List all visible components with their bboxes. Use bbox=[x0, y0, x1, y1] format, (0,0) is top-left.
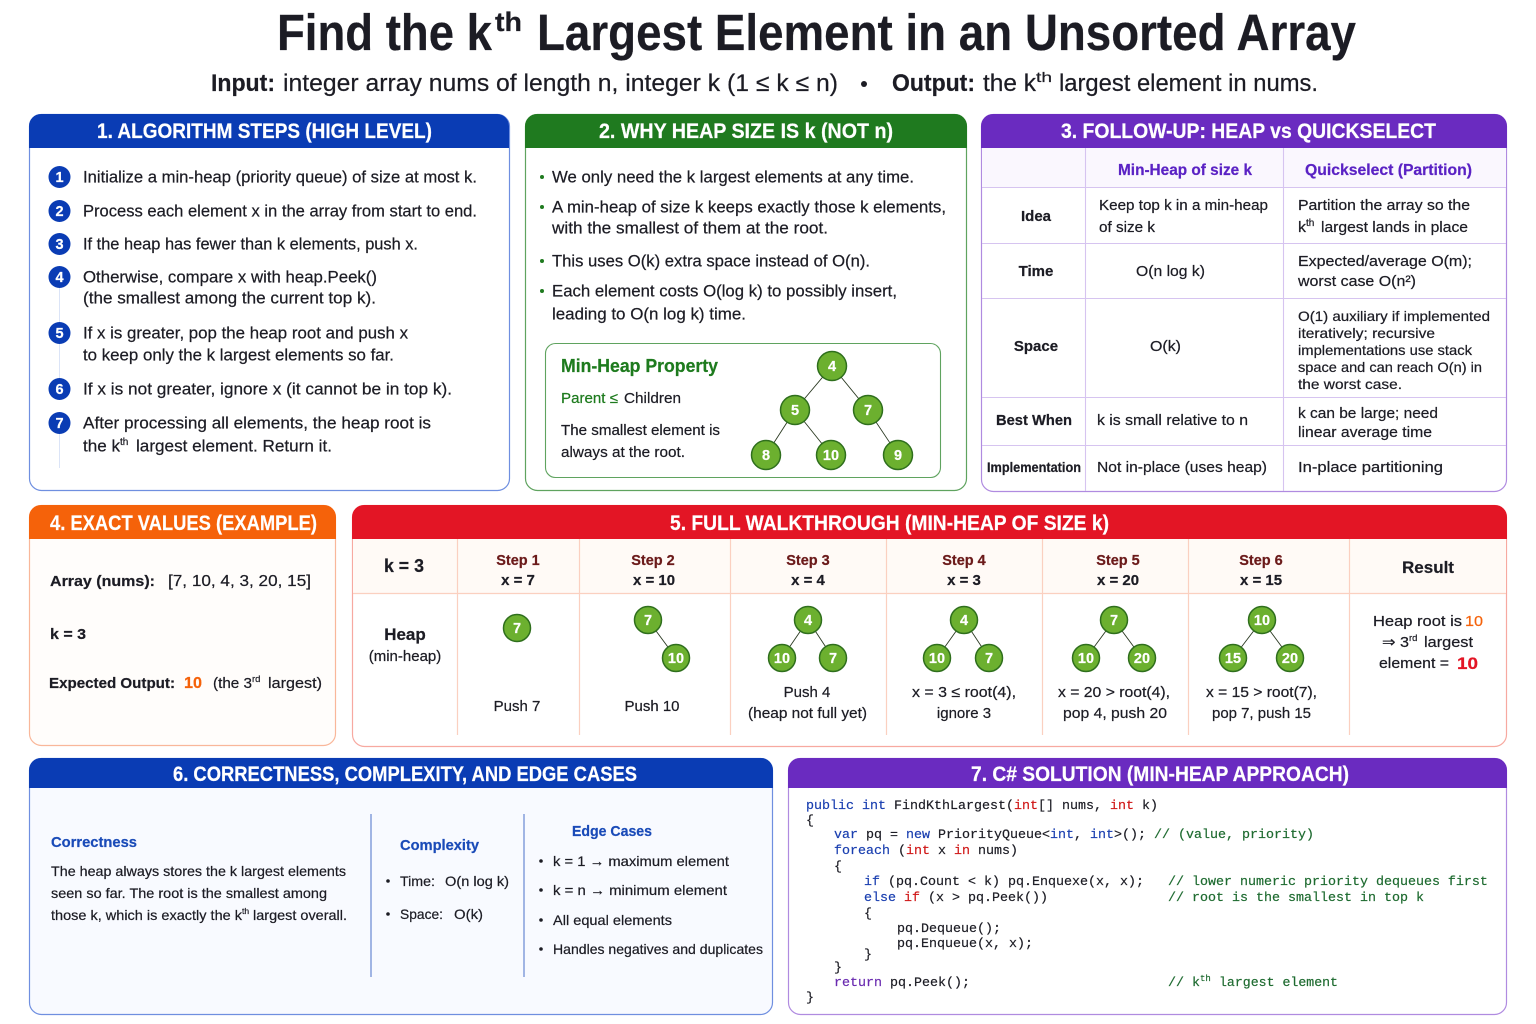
code block: pq.Dequeue(); bbox=[897, 922, 1001, 937]
complexity text: Space: bbox=[400, 906, 443, 922]
row: idea: Idea bbox=[1021, 208, 1052, 225]
step connectors bbox=[58, 288, 60, 468]
complexity text: O(n log k) bbox=[445, 873, 509, 889]
min-heap tree diagram bbox=[752, 352, 912, 470]
step 5: x = 20 bbox=[1097, 572, 1139, 589]
step 2: Step 2 bbox=[631, 553, 675, 569]
code block: pq.Enqueue(x, x); bbox=[897, 937, 1033, 952]
callout: min-heap property: Children bbox=[624, 390, 681, 407]
row: idea: largest lands in place bbox=[1321, 219, 1468, 236]
heading: algorithm steps: 1. ALGORITHM STEPS (HIGH LEVEL) bbox=[97, 120, 432, 143]
row: time: worst case O(n²) bbox=[1297, 273, 1416, 290]
step 6: 20 bbox=[1282, 651, 1298, 667]
row: idea bbox=[1021, 197, 1470, 236]
row labels: (min-heap) bbox=[369, 648, 441, 665]
step 4: x = 3 ≤ root(4), bbox=[912, 684, 1016, 701]
step 6: 15 bbox=[1225, 651, 1241, 667]
correctness text: largest overall. bbox=[253, 907, 347, 923]
expected output bbox=[49, 674, 322, 692]
step 6 bbox=[1206, 553, 1317, 722]
panel: heap vs quickselect bbox=[981, 114, 1507, 492]
table column headers bbox=[1118, 162, 1472, 179]
edge cases text: k = n → minimum element bbox=[553, 882, 727, 898]
row: implementation: Not in-place (uses heap) bbox=[1097, 459, 1267, 476]
step 4 bbox=[912, 553, 1016, 722]
result column: ⇒ 3 bbox=[1382, 634, 1409, 651]
correctness text: those k, which is exactly the k bbox=[51, 907, 243, 923]
title: Largest Element in an Unsorted Array bbox=[537, 4, 1357, 61]
row: time: Time bbox=[1019, 263, 1053, 280]
table column headers: Quickselect (Partition) bbox=[1305, 162, 1472, 179]
code block: public int FindKthLargest(int[] nums, int k) bbox=[806, 799, 1158, 814]
step 5 bbox=[48, 322, 409, 364]
callout: min-heap property: The smallest element is bbox=[561, 422, 720, 439]
step 1: Step 1 bbox=[496, 553, 540, 569]
heading: why heap size: 2. WHY HEAP SIZE IS k (NOT n) bbox=[599, 120, 893, 143]
code block: return pq.Peek(); bbox=[834, 976, 970, 991]
step 2 bbox=[624, 553, 690, 715]
title: Find the k bbox=[277, 4, 493, 61]
code block bbox=[806, 799, 1488, 1006]
step 6: x = 15 bbox=[1240, 572, 1282, 589]
step 2: 2 bbox=[55, 204, 64, 220]
callout: min-heap property: always at the root. bbox=[561, 444, 685, 461]
bullet list: We only need the k largest elements at any time. bbox=[552, 168, 914, 186]
complexity text: Complexity bbox=[400, 837, 480, 854]
row labels: Heap bbox=[384, 625, 426, 644]
row: idea: Partition the array so the bbox=[1298, 197, 1470, 214]
bullet list bbox=[540, 168, 946, 324]
panel: exact values bbox=[29, 505, 336, 746]
expected output: rd bbox=[252, 674, 260, 685]
code block: // lower numeric priority dequeues first bbox=[1168, 875, 1488, 890]
step 4: Otherwise, compare x with heap.Peek() bbox=[83, 268, 377, 286]
step 5: to keep only the k largest elements so far. bbox=[83, 346, 394, 364]
row: time: Expected/average O(m); bbox=[1298, 253, 1472, 270]
bullet list: A min-heap of size k keeps exactly those k elements, bbox=[552, 198, 946, 216]
step 5: 20 bbox=[1134, 651, 1150, 667]
step 2: 10 bbox=[668, 651, 684, 667]
edge cases text: Edge Cases bbox=[572, 823, 652, 840]
step 4: 7 bbox=[985, 651, 993, 667]
expected output: (the 3 bbox=[213, 675, 252, 692]
row: space: O(1) auxiliary if implemented bbox=[1298, 308, 1490, 324]
code block: } bbox=[806, 991, 814, 1006]
bullet list: with the smallest of them at the root. bbox=[551, 220, 828, 238]
panel: why heap size is k bbox=[525, 114, 967, 490]
min-heap tree diagram: 7 bbox=[864, 403, 872, 419]
step 3 bbox=[748, 553, 867, 722]
step 5: If x is greater, pop the heap root and push x bbox=[83, 324, 409, 342]
title: th bbox=[495, 7, 522, 37]
row: implementation bbox=[987, 459, 1443, 476]
step 7 bbox=[48, 412, 431, 456]
result column: Heap root is bbox=[1373, 613, 1462, 630]
subtitle: input and output bbox=[211, 69, 1318, 97]
step 4: (the smallest among the current top k). bbox=[83, 290, 376, 308]
code block: { bbox=[806, 814, 814, 829]
code block: } bbox=[834, 961, 842, 976]
step 5: 10 bbox=[1078, 651, 1094, 667]
expected output: 10 bbox=[184, 675, 202, 692]
step 1 bbox=[494, 553, 540, 715]
row: space: Space bbox=[1014, 338, 1058, 355]
step 6: 6 bbox=[55, 382, 64, 398]
correctness text: The heap always stores the k largest elements bbox=[51, 863, 346, 879]
panel: algorithm steps bbox=[29, 114, 510, 490]
bullet list: Each element costs O(log k) to possibly insert, bbox=[552, 282, 897, 300]
row labels bbox=[369, 556, 441, 665]
step 2: Push 10 bbox=[624, 698, 680, 715]
code block: else if (x > pq.Peek()) bbox=[864, 891, 1048, 906]
heading: correctness: 6. CORRECTNESS, COMPLEXITY, AND EDGE CASES bbox=[173, 763, 637, 786]
min-heap tree diagram: 8 bbox=[762, 448, 770, 464]
step 1: Initialize a min-heap (priority queue) of size at most k. bbox=[83, 168, 477, 186]
row: space: space and can reach O(n) in bbox=[1298, 359, 1482, 375]
edge cases text bbox=[539, 823, 763, 957]
step 3: 3 bbox=[55, 237, 64, 253]
edge cases text: All equal elements bbox=[553, 912, 672, 928]
step 5: Step 5 bbox=[1096, 553, 1140, 569]
step 4 bbox=[48, 266, 377, 308]
step 3: If the heap has fewer than k elements, push x. bbox=[83, 236, 418, 254]
min-heap tree diagram: 5 bbox=[791, 403, 799, 419]
expected output: largest) bbox=[268, 675, 322, 692]
panel: full walkthrough bbox=[352, 505, 1507, 746]
row: idea: k bbox=[1298, 219, 1307, 236]
row: space: O(k) bbox=[1150, 338, 1181, 355]
step 1: x = 7 bbox=[501, 572, 535, 589]
step 2: x = 10 bbox=[633, 572, 675, 589]
min-heap tree diagram: 9 bbox=[894, 448, 902, 464]
row: implementation: In-place partitioning bbox=[1298, 459, 1443, 476]
row: best when: k is small relative to n bbox=[1097, 412, 1248, 429]
code block: // root is the smallest in top k bbox=[1168, 891, 1424, 906]
step 6: Step 6 bbox=[1239, 553, 1283, 569]
step 6: pop 7, push 15 bbox=[1212, 705, 1311, 722]
bullet list: leading to O(n log k) time. bbox=[552, 306, 746, 324]
row: space: implementations use stack bbox=[1298, 342, 1473, 358]
step 4: 4 bbox=[960, 613, 968, 629]
step 3: Push 4 bbox=[784, 684, 830, 701]
callout: min-heap property bbox=[546, 344, 940, 478]
array value: [7, 10, 4, 3, 20, 15] bbox=[168, 573, 311, 590]
step 6: If x is not greater, ignore x (it cannot be in top k). bbox=[83, 380, 452, 398]
row: idea: of size k bbox=[1099, 219, 1155, 236]
step 5 bbox=[1058, 553, 1170, 722]
row: time: O(n log k) bbox=[1136, 263, 1205, 280]
step 1: 7 bbox=[513, 621, 521, 637]
step 7: th bbox=[120, 437, 128, 448]
row: time bbox=[1019, 253, 1472, 290]
min-heap tree diagram: 4 bbox=[828, 359, 836, 375]
result column: rd bbox=[1409, 633, 1417, 644]
callout: min-heap property: Min-Heap Property bbox=[561, 356, 718, 376]
step 3: 10 bbox=[774, 651, 790, 667]
correctness text: seen so far. The root is the smallest among bbox=[51, 885, 327, 901]
edge cases text: Handles negatives and duplicates bbox=[553, 941, 763, 957]
step 7: After processing all elements, the heap root is bbox=[83, 414, 431, 432]
step 3: Step 3 bbox=[786, 553, 830, 569]
edge cases text: k = 1 → maximum element bbox=[553, 853, 729, 869]
min-heap tree diagram: 10 bbox=[823, 448, 839, 464]
step 4: 10 bbox=[929, 651, 945, 667]
step 3: x = 4 bbox=[791, 572, 826, 589]
code block: { bbox=[864, 907, 872, 922]
k value: k = 3 bbox=[50, 626, 86, 643]
result column: 10 bbox=[1457, 654, 1478, 673]
row: best when: linear average time bbox=[1298, 424, 1432, 441]
heading: C# solution: 7. C# SOLUTION (MIN-HEAP APPROACH) bbox=[971, 763, 1349, 786]
step 7: the k bbox=[83, 438, 121, 456]
row: space: the worst case. bbox=[1298, 376, 1402, 392]
result column: 10 bbox=[1465, 613, 1483, 630]
step 7: 7 bbox=[55, 416, 64, 432]
subtitle: input and output: Input: bbox=[211, 70, 275, 97]
complexity text: Time: bbox=[400, 873, 435, 889]
correctness text: Correctness bbox=[51, 834, 137, 851]
bullet list: This uses O(k) extra space instead of O(n). bbox=[552, 252, 870, 270]
complexity text: O(k) bbox=[454, 906, 483, 922]
subtitle: input and output: the k bbox=[983, 70, 1037, 97]
row: idea: th bbox=[1306, 218, 1314, 229]
code block: th bbox=[1200, 974, 1211, 984]
row: space bbox=[1014, 308, 1490, 392]
array value: Array (nums): bbox=[50, 573, 155, 590]
step 4: x = 3 bbox=[947, 572, 981, 589]
code block: { bbox=[834, 860, 842, 875]
row labels: k = 3 bbox=[384, 556, 424, 576]
row: best when bbox=[996, 405, 1438, 441]
step 5: pop 4, push 20 bbox=[1063, 705, 1167, 722]
step 5: x = 20 > root(4), bbox=[1058, 684, 1170, 701]
callout: min-heap property: Parent ≤ bbox=[561, 390, 618, 407]
table column headers: Min-Heap of size k bbox=[1118, 162, 1252, 179]
heading: walkthrough: 5. FULL WALKTHROUGH (MIN-HEAP OF SIZE k) bbox=[670, 512, 1109, 535]
correctness text: th bbox=[242, 906, 249, 916]
result column: Result bbox=[1402, 558, 1454, 577]
step 3: 7 bbox=[829, 651, 837, 667]
result column bbox=[1373, 558, 1483, 673]
step 4: 4 bbox=[55, 270, 64, 286]
code block: largest element bbox=[1219, 976, 1338, 991]
step 1: 1 bbox=[55, 170, 64, 186]
step 5: 7 bbox=[1110, 613, 1118, 629]
correctness text bbox=[51, 834, 347, 923]
row: best when: Best When bbox=[996, 412, 1072, 429]
step 1: Push 7 bbox=[494, 698, 540, 715]
subtitle: input and output: th bbox=[1036, 69, 1052, 85]
step 2: 7 bbox=[644, 613, 652, 629]
step 7: largest element. Return it. bbox=[136, 438, 332, 456]
panel: correctness, complexity, edge cases bbox=[29, 758, 773, 1014]
subtitle: input and output: integer array nums of length n, integer k (1 ≤ k ≤ n) bbox=[283, 70, 838, 97]
row: best when: k can be large; need bbox=[1298, 405, 1438, 422]
result column: element = bbox=[1379, 655, 1449, 672]
step 5: 5 bbox=[55, 326, 64, 342]
code block: if (pq.Count < k) pq.Enquexe(x, x); bbox=[864, 875, 1144, 890]
subtitle: input and output: largest element in nums. bbox=[1059, 70, 1318, 97]
row: implementation: Implementation bbox=[987, 459, 1081, 475]
step 3: 4 bbox=[804, 613, 812, 629]
step 2: Process each element x in the array from start to end. bbox=[83, 202, 477, 220]
row: idea: Keep top k in a min-heap bbox=[1099, 197, 1268, 214]
step 6: 10 bbox=[1254, 613, 1270, 629]
title bbox=[277, 4, 1357, 61]
expected output: Expected Output: bbox=[49, 675, 175, 692]
row: space: iteratively; recursive bbox=[1298, 325, 1435, 341]
subtitle: input and output: Output: bbox=[892, 70, 975, 97]
step 6: x = 15 > root(7), bbox=[1206, 684, 1317, 701]
code block: } bbox=[864, 948, 872, 963]
step 4: ignore 3 bbox=[937, 705, 991, 722]
panel: C# solution bbox=[788, 758, 1507, 1014]
code block: // k bbox=[1168, 976, 1200, 991]
code block: foreach (int x in nums) bbox=[834, 844, 1018, 859]
heading: exact values: 4. EXACT VALUES (EXAMPLE) bbox=[50, 512, 317, 535]
complexity text bbox=[386, 837, 509, 922]
step 3: (heap not full yet) bbox=[748, 705, 867, 722]
result column: largest bbox=[1424, 634, 1474, 651]
code block: var pq = new PriorityQueue<int, int>(); // (value, priority) bbox=[834, 828, 1314, 843]
step 4: Step 4 bbox=[942, 553, 986, 569]
array value bbox=[50, 573, 311, 590]
heading: follow-up: 3. FOLLOW-UP: HEAP vs QUICKSELECT bbox=[1061, 120, 1436, 143]
